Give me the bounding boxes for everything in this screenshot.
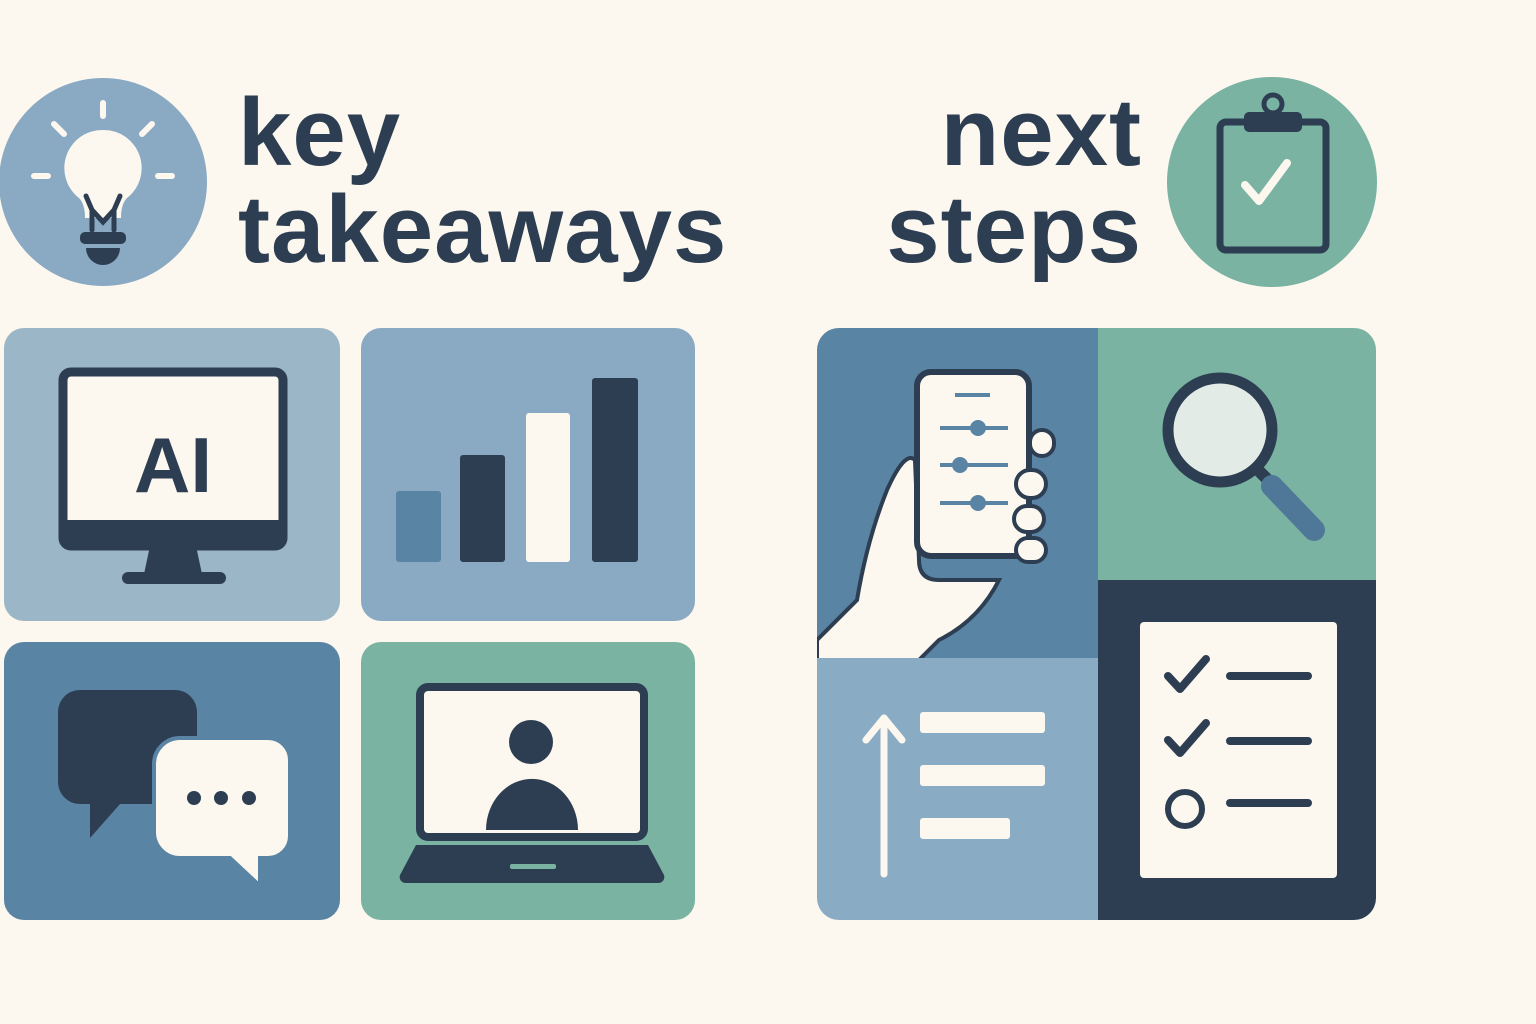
title: next steps bbox=[886, 79, 1142, 283]
panel: AI monitor: AI bbox=[134, 421, 212, 509]
icon: clipboard circle bbox=[1167, 77, 1377, 287]
panel: laptop video call bbox=[361, 642, 695, 920]
quadrant: list with arrow bbox=[817, 658, 1098, 920]
title: key takeaways: takeaways bbox=[238, 176, 727, 283]
panel: next steps grid bbox=[817, 328, 1376, 920]
title: next steps: steps bbox=[886, 176, 1142, 283]
icon: lightbulb circle bbox=[0, 78, 207, 286]
title: key takeaways bbox=[238, 79, 727, 283]
quadrant: phone in hand bbox=[817, 328, 1098, 680]
panel: chat bubbles bbox=[4, 642, 340, 920]
quadrant: checklist bbox=[1098, 580, 1376, 920]
title: key takeaways: key bbox=[238, 79, 401, 186]
panel: bar chart bbox=[361, 328, 695, 621]
panel: AI monitor bbox=[4, 328, 340, 621]
title: next steps: next bbox=[941, 79, 1142, 186]
quadrant: magnifier bbox=[1098, 328, 1376, 580]
